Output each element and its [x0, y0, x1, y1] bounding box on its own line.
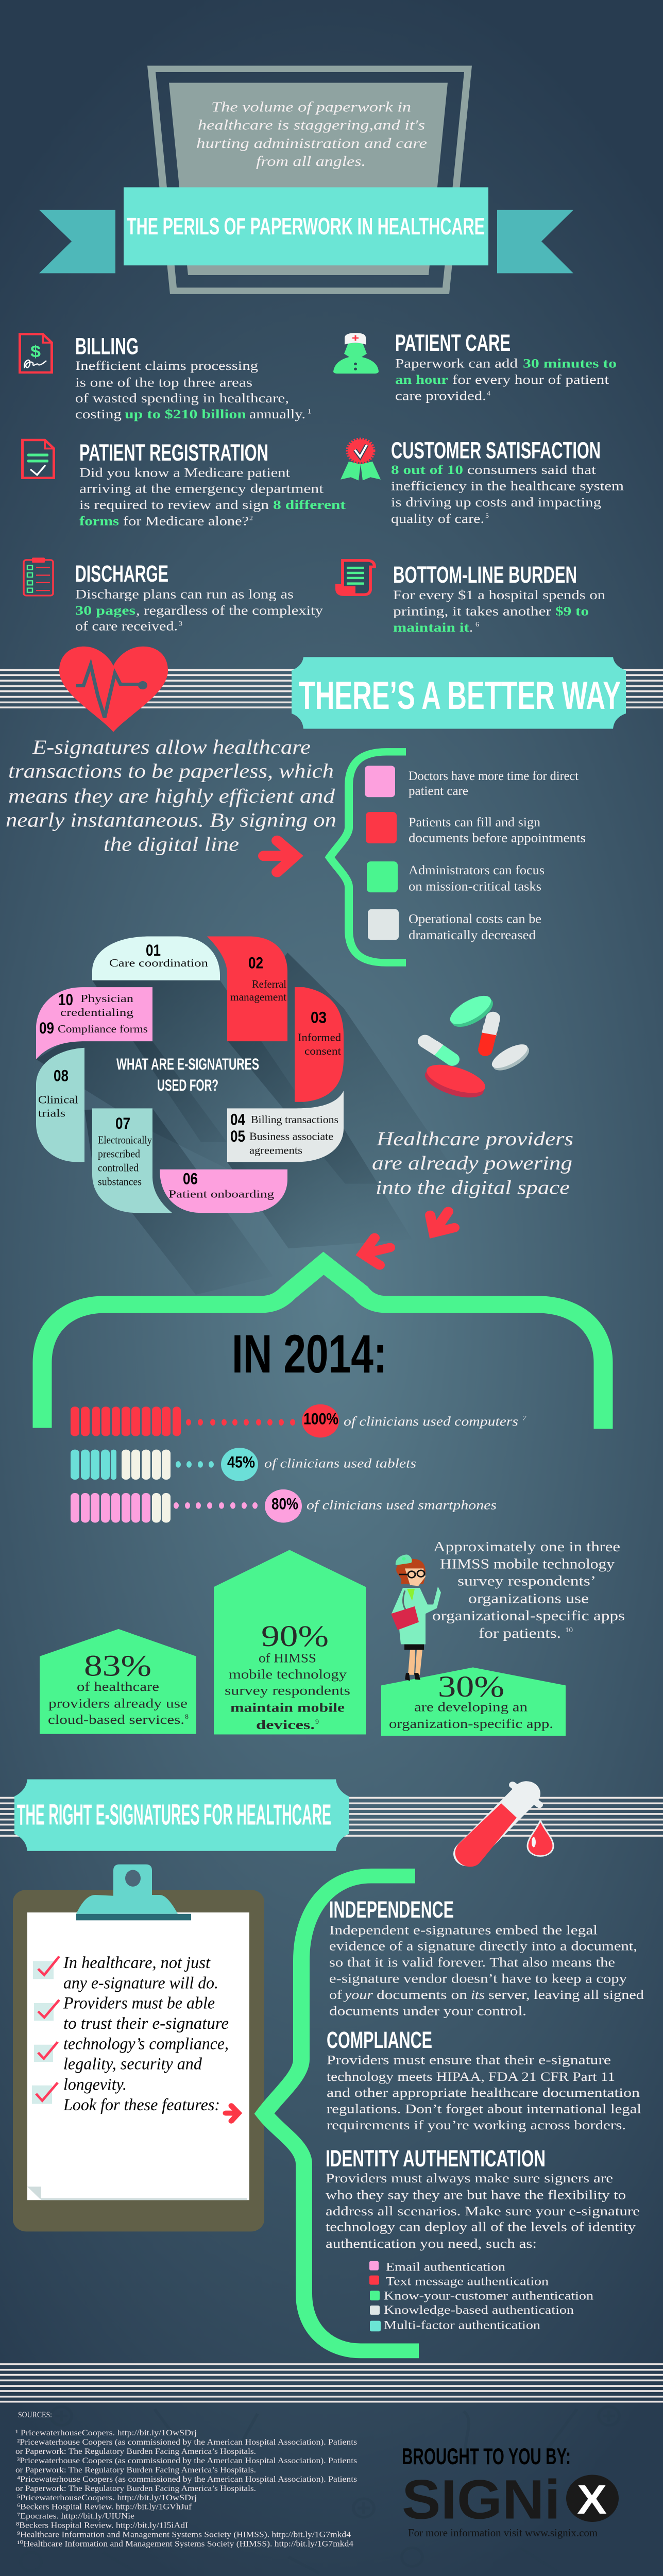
- text block: 4: [487, 389, 490, 397]
- checkmarks: [32, 1956, 59, 2104]
- authentication list: Knowledge-based authentication: [384, 2303, 574, 2317]
- heading: PATIENT CARE: [395, 330, 511, 357]
- house: 90 percent: devices.: [256, 1717, 315, 1732]
- text block: [75, 358, 311, 421]
- label: 7: [522, 1415, 526, 1422]
- bar row: [71, 1406, 181, 1436]
- panel: identity authentication: [326, 2145, 640, 2332]
- text block: requirements if you’re working across borders.: [327, 2117, 626, 2132]
- benefit: administrators: Administrators can focus: [409, 863, 545, 877]
- segment 08: [36, 1048, 84, 1162]
- stat: computers: [71, 1404, 526, 1437]
- chart title: [116, 1056, 259, 1095]
- icon: test tube and blood drop: [455, 1785, 553, 1867]
- text block: .: [469, 620, 473, 635]
- chart: what are e-signatures used for: [36, 936, 344, 1213]
- e-signatures statement: nearly instantaneous. By signing on: [6, 809, 336, 832]
- icon: heart with pulse: [59, 647, 168, 732]
- sources: ⁵PricewaterhouseCoopers. http://bit.ly/1OwSDrj: [17, 2493, 197, 2502]
- percent badge: 100%: [303, 1410, 338, 1428]
- text block: address all scenarios. Make sure your e-signature: [326, 2204, 640, 2218]
- segment 03: 03: [311, 1009, 327, 1027]
- segment 09 and 10: 10: [58, 991, 73, 1009]
- text block: Providers must always make sure signers are: [326, 2171, 613, 2185]
- panel: bottom-line burden: [337, 561, 605, 635]
- authentication list: Email authentication: [386, 2261, 505, 2274]
- checklist text: Look for these features:: [63, 2096, 220, 2114]
- segment 04 and 05: 04: [230, 1111, 245, 1129]
- arrow: [430, 1211, 454, 1233]
- authentication list: Multi-factor authentication: [384, 2319, 540, 2332]
- brought to you by: [402, 2444, 619, 2539]
- house: 83 percent: 83%: [84, 1650, 151, 1683]
- bracket: [42, 1263, 603, 1429]
- house: 83 percent: of healthcare: [77, 1680, 159, 1694]
- house: 83 percent: cloud-based services.: [48, 1712, 184, 1727]
- segment 02: [207, 936, 287, 1041]
- text block: maintain it: [393, 620, 469, 635]
- one in three text: organizational-specific apps: [432, 1608, 625, 1623]
- text block: for Medicare alone?: [123, 514, 249, 528]
- percent badge: [302, 1404, 339, 1437]
- heading: DISCHARGE: [75, 561, 168, 587]
- text block: [79, 465, 346, 528]
- text block: is driving up costs and impacting: [391, 495, 601, 509]
- text block: Paperwork can add: [395, 356, 518, 370]
- icon: scroll: [337, 561, 375, 595]
- segment 06: Patient onboarding: [168, 1188, 274, 1200]
- segment 02: Referral: [252, 978, 286, 990]
- text block: [391, 462, 624, 526]
- text block: Independent e-signatures embed the legal: [329, 1923, 598, 1937]
- authentication list: Text message authentication: [386, 2275, 549, 2288]
- text block: who they say they are but have the flexibility to: [326, 2188, 626, 2202]
- segment 03: Informed: [298, 1031, 342, 1043]
- text block: server, leaving all signed: [488, 1987, 644, 2002]
- icon: billing document: $: [30, 343, 41, 361]
- segment 03: consent: [304, 1045, 342, 1057]
- sources: SOURCES:: [18, 2410, 52, 2419]
- segment 06: [160, 1170, 287, 1213]
- checklist text: legality, security and: [63, 2055, 202, 2073]
- sources: [15, 2410, 357, 2548]
- segment 04 and 05: 05: [230, 1128, 245, 1145]
- benefit: administrators: on mission-critical tasks: [409, 879, 541, 893]
- checklist text: any e-signature will do.: [63, 1974, 218, 1992]
- sources: ³Pricewaterhouse Coopers (as commissioned by the American Hospital Association). Patients: [17, 2456, 357, 2465]
- one in three text: organizations use: [468, 1591, 589, 1606]
- segment 04 and 05: Billing transactions: [251, 1113, 338, 1126]
- text block: arriving at the emergency department: [79, 481, 324, 496]
- checklist text: to trust their e-signature: [63, 2015, 229, 2033]
- heading: in 2014: IN 2014:: [232, 1323, 387, 1384]
- text block: e-signature vendor doesn’t have to keep a copy: [329, 1971, 627, 1986]
- house: 30 percent: [381, 1667, 566, 1736]
- providers statement: [372, 1128, 573, 1198]
- benefit: patients: [366, 812, 586, 845]
- benefit: costs: dramatically decreased: [409, 927, 536, 942]
- text block: 8 out of 10: [391, 462, 463, 477]
- panel: patient care: [333, 330, 617, 403]
- house: 90 percent: [214, 1550, 366, 1735]
- one in three text: 10: [565, 1626, 573, 1634]
- clipboard: [13, 1865, 264, 2231]
- sources: or Paperwork: The Regulatory Burden Facing America’s Hospitals.: [15, 2447, 256, 2456]
- segment 02: 02: [248, 954, 263, 972]
- text block: [329, 1923, 644, 2018]
- providers statement: are already powering: [372, 1152, 572, 1174]
- sources: ⁴Pricewaterhouse Coopers (as commissioned by the American Hospital Association). Patients: [17, 2475, 357, 2484]
- segment 07: 07: [115, 1114, 130, 1132]
- segment 07: controlled: [98, 1161, 139, 1174]
- banner: the right e-signatures: [14, 1780, 349, 1851]
- text block: [393, 587, 605, 635]
- segment 08: trials: [38, 1107, 65, 1119]
- text block: documents on: [377, 1987, 467, 2002]
- text block: Inefficient claims processing: [75, 358, 258, 373]
- checklist text: Providers must be able: [63, 1994, 215, 2012]
- sources: ²Pricewaterhouse Coopers (as commissioned by the American Hospital Association). Patients: [17, 2437, 357, 2447]
- segment 04 and 05: Business associate: [249, 1130, 333, 1142]
- text block: 3: [179, 620, 182, 627]
- intro text: [196, 99, 427, 170]
- house: 90 percent: of HIMSS: [259, 1651, 316, 1665]
- text block: 5: [485, 512, 489, 519]
- text block: Discharge plans can run as long as: [75, 587, 294, 601]
- intro text: healthcare is staggering,and it's: [198, 117, 425, 133]
- stat: tablets: [71, 1448, 416, 1481]
- e-signatures statement: means they are highly efficient and: [8, 785, 335, 808]
- chart title: WHAT ARE E-SIGNATURES: [116, 1056, 259, 1073]
- segment 09 and 10: credentialing: [60, 1006, 133, 1019]
- text block: of care received.: [75, 619, 178, 633]
- text block: technology can deploy all of the levels of identity: [326, 2219, 636, 2234]
- house: 90 percent: 9: [315, 1718, 319, 1725]
- text block: consumers said that: [467, 462, 597, 477]
- e-signatures statement: transactions to be paperless, which: [8, 760, 334, 783]
- segment 07: Electronically: [98, 1134, 152, 1146]
- intro panel: [169, 83, 448, 275]
- paper: [27, 1912, 249, 2200]
- brace: [264, 1876, 419, 2351]
- text block: for every hour of patient: [452, 372, 609, 387]
- nurse illustration: [391, 1554, 441, 1681]
- heading: COMPLIANCE: [327, 2027, 432, 2053]
- benefit: patients: Patients can fill and sign: [409, 815, 540, 829]
- segment 01: 01: [146, 942, 161, 960]
- intro text: The volume of paperwork in: [211, 99, 411, 115]
- arrow: [363, 1238, 390, 1265]
- percent badge: [221, 1448, 258, 1481]
- text block: documents under your control.: [329, 2004, 526, 2018]
- text block: printing, it takes another: [393, 604, 551, 618]
- arrow: [226, 2106, 239, 2121]
- panel: billing: [20, 333, 311, 421]
- house: 90 percent: survey respondents: [225, 1683, 350, 1698]
- panel: patient registration: [23, 439, 346, 528]
- icon: clipboard checklist: [24, 557, 53, 596]
- intro frame: [147, 65, 472, 294]
- house: 83 percent: providers already use: [48, 1696, 188, 1710]
- website note: For more information visit www.signix.com: [408, 2527, 598, 2539]
- text block: [326, 2171, 640, 2250]
- house: 83 percent: 8: [185, 1713, 189, 1720]
- intro text: from all angles.: [256, 154, 366, 170]
- text block: Providers must ensure that their e-signature: [327, 2053, 611, 2067]
- dots: [186, 1419, 295, 1426]
- title ribbon: [39, 187, 573, 273]
- house: 90 percent: maintain mobile: [230, 1700, 345, 1715]
- panel: compliance: [327, 2027, 641, 2132]
- segment 07: prescribed: [98, 1148, 141, 1160]
- text block: Did you know a Medicare patient: [79, 465, 291, 480]
- label: of clinicians used computers: [344, 1414, 518, 1429]
- text block: quality of care.: [391, 511, 484, 526]
- checklist text: [63, 1954, 229, 2114]
- dots: [174, 1502, 258, 1509]
- arrow: [264, 841, 295, 872]
- text block: care provided.: [395, 388, 486, 403]
- text block: , regardless of the complexity: [136, 603, 324, 617]
- segment 01: [92, 936, 220, 980]
- banner: there's a better way: [292, 657, 626, 728]
- text block: [75, 587, 324, 633]
- panel: discharge: [24, 557, 324, 633]
- text block: For every $1 a hospital spends on: [393, 587, 605, 602]
- text block: is required to review and sign: [79, 497, 269, 512]
- segment 07: substances: [98, 1175, 142, 1188]
- benefit: costs: Operational costs can be: [409, 911, 541, 926]
- text block: 30 minutes to: [523, 356, 617, 370]
- e-signatures statement: the digital line: [104, 833, 239, 856]
- text block: authentication you need, such as:: [326, 2236, 537, 2250]
- house: 83 percent: [40, 1629, 196, 1734]
- bar row: [71, 1493, 171, 1522]
- benefit: doctors: Doctors have more time for direct: [409, 768, 579, 783]
- stat: smartphones: [71, 1489, 497, 1522]
- percent badge: 45%: [227, 1453, 255, 1471]
- percent badge: 80%: [271, 1495, 298, 1513]
- checklist text: longevity.: [63, 2076, 127, 2094]
- text block: and other appropriate healthcare documentation: [327, 2086, 640, 2100]
- house: 30 percent: 30%: [438, 1670, 504, 1703]
- providers statement: Healthcare providers: [376, 1128, 573, 1150]
- segment 02: management: [230, 991, 287, 1003]
- checklist text: In healthcare, not just: [63, 1954, 211, 1972]
- heading: PATIENT REGISTRATION: [79, 439, 268, 466]
- sources: or Paperwork: The Regulatory Burden Facing America’s Hospitals.: [15, 2484, 256, 2493]
- text block: evidence of a signature directly into a document,: [329, 1939, 637, 1953]
- clip: [76, 1865, 191, 1920]
- text block: costing: [75, 407, 122, 421]
- text block: $9 to: [555, 604, 589, 618]
- text block: is one of the top three areas: [75, 375, 252, 389]
- one in three text: survey respondents’: [457, 1574, 596, 1589]
- segment 09 and 10: [36, 987, 152, 1059]
- icon: checked document: [23, 440, 54, 478]
- e-signatures statement: [6, 736, 336, 856]
- segment 09 and 10: Compliance forms: [58, 1023, 148, 1035]
- text block: up to $210 billion: [125, 407, 246, 421]
- text block: your: [343, 1987, 373, 2002]
- one in three text: for patients.: [479, 1626, 561, 1641]
- icon: award ribbon: [341, 439, 381, 481]
- authentication list: Know-your-customer authentication: [384, 2289, 593, 2302]
- segment 09 and 10: 09: [39, 1020, 54, 1037]
- text block: [395, 356, 617, 403]
- icon: billing document: [20, 334, 52, 372]
- intro text: hurting administration and care: [196, 136, 427, 151]
- sources: ¹⁰Healthcare Information and Management Systems Society (HIMSS). http://bit.ly/1G7mkd4: [17, 2539, 353, 2548]
- text block: technology meets HIPAA, FDA 21 CFR Part 11: [327, 2069, 615, 2083]
- house: 90 percent: mobile technology: [229, 1667, 347, 1682]
- heading: INDEPENDENCE: [329, 1896, 454, 1923]
- segment 04 and 05: agreements: [249, 1144, 302, 1156]
- text block: regulations. Don’t forget about international legal: [327, 2102, 641, 2116]
- percent badge: [265, 1489, 302, 1522]
- logo: signix: X: [577, 2476, 607, 2522]
- text block: 2: [249, 514, 253, 522]
- text block: of wasted spending in healthcare,: [75, 391, 289, 405]
- label: of clinicians used smartphones: [307, 1498, 497, 1512]
- text block: inefficiency in the healthcare system: [391, 479, 624, 493]
- checklist text: technology’s compliance,: [63, 2035, 229, 2053]
- segment 09 and 10: Physician: [80, 992, 134, 1005]
- e-signatures statement: E-signatures allow healthcare: [32, 736, 311, 758]
- one in three text: Approximately one in three: [433, 1539, 620, 1555]
- sources: ⁹Healthcare Information and Management Systems Society (HIMSS). http://bit.ly/1G7mkd4: [17, 2530, 351, 2539]
- sources: ⁷Epocrates. http://bit.ly/UIUNie: [17, 2512, 134, 2520]
- benefit: doctors: patient care: [409, 783, 468, 798]
- label: of clinicians used tablets: [264, 1456, 416, 1470]
- brace: [330, 752, 406, 963]
- panel: independence: [329, 1896, 644, 2018]
- text block: of: [329, 1987, 342, 2002]
- chart title: USED FOR?: [157, 1077, 218, 1095]
- bar row: [71, 1450, 171, 1480]
- icon: nurse: [333, 333, 379, 374]
- segment 06: 06: [183, 1170, 198, 1188]
- text block: 30 pages: [75, 603, 135, 617]
- benefit: patients: documents before appointments: [409, 831, 586, 845]
- segment 08: Clinical: [38, 1094, 78, 1106]
- text block: 8 different: [273, 497, 346, 512]
- benefit: costs: [368, 909, 541, 942]
- benefit: doctors: [365, 766, 579, 798]
- segment 03: [295, 987, 344, 1102]
- house: 30 percent: are developing an: [414, 1700, 528, 1714]
- logo: signix: SIGNi: [402, 2469, 560, 2531]
- text block: so that it is valid forever. That also means the: [329, 1955, 615, 1970]
- text block: its: [471, 1987, 485, 2002]
- benefits list: [365, 766, 586, 942]
- sources: ⁶Beckers Hospital Review. http://bit.ly/1GVhJuf: [17, 2502, 192, 2512]
- text block: annually.: [249, 407, 305, 421]
- authentication list: [369, 2261, 593, 2332]
- text block: [327, 2053, 641, 2132]
- providers statement: into the digital space: [376, 1176, 570, 1198]
- text block: 6: [475, 621, 479, 628]
- sources: ⁸Beckers Hospital Review. http://bit.ly/1I5iAdI: [16, 2520, 188, 2530]
- sources: or Paperwork: The Regulatory Burden Facing America’s Hospitals.: [15, 2465, 256, 2475]
- benefit: administrators: [367, 861, 545, 893]
- text block: forms: [79, 514, 119, 528]
- one in three text: HIMSS mobile technology: [440, 1557, 615, 1572]
- sources: ¹ PricewaterhouseCoopers. http://bit.ly/1OwSDrj: [15, 2428, 197, 2437]
- heading: BILLING: [75, 333, 139, 360]
- icon: pills: [421, 990, 534, 1104]
- segment 07: [92, 1108, 172, 1213]
- segment 04 and 05: [227, 1091, 344, 1162]
- house: 90 percent: 90%: [261, 1620, 329, 1653]
- segment 08: 08: [54, 1067, 69, 1085]
- panel: customer satisfaction: [341, 437, 624, 526]
- segment 01: Care coordination: [109, 957, 209, 969]
- text block: 1: [308, 408, 311, 415]
- text block: an hour: [395, 372, 448, 387]
- house: 30 percent: organization-specific app.: [389, 1716, 553, 1731]
- one in three text: [432, 1539, 625, 1641]
- dots: [176, 1461, 214, 1468]
